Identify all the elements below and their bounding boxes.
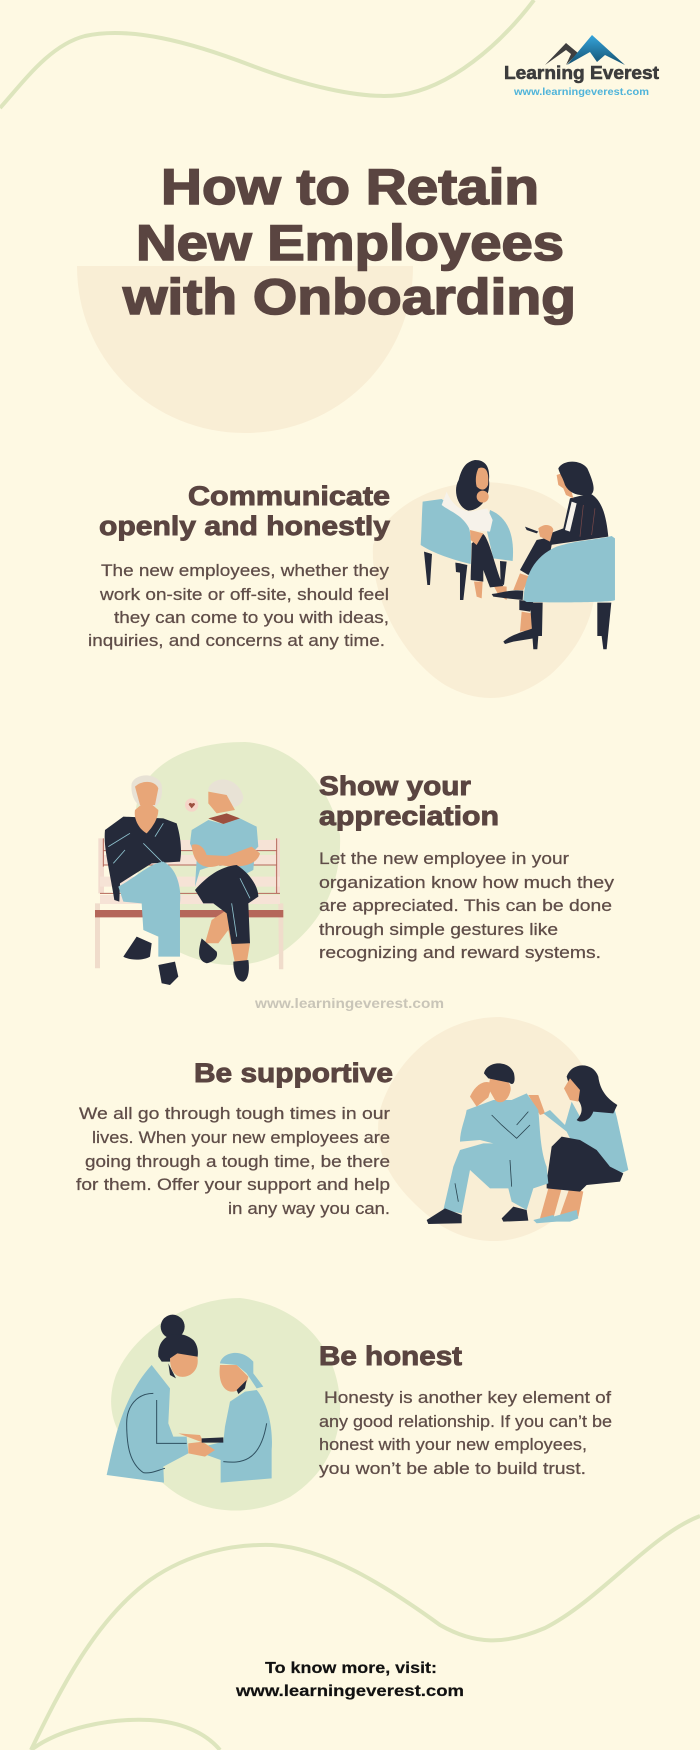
illustration: person comforting a friend bbox=[427, 1063, 628, 1224]
heading bbox=[319, 771, 499, 831]
heading: Be supportive bbox=[194, 1058, 393, 1088]
heading: Be honest bbox=[319, 1341, 462, 1371]
panel: communicate openly and honestly bbox=[88, 460, 615, 698]
body text: going through a tough time, be there bbox=[85, 1153, 390, 1171]
logo: Learning Everest bbox=[504, 35, 659, 98]
body text: through simple gestures like bbox=[319, 921, 558, 939]
body text: recognizing and reward systems. bbox=[319, 944, 601, 962]
body text: inquiries, and concerns at any time. bbox=[88, 632, 385, 650]
panel: be honest bbox=[107, 1298, 612, 1511]
heading: openly and honestly bbox=[99, 511, 390, 541]
footer call to action bbox=[235, 1660, 464, 1700]
heading bbox=[99, 481, 390, 541]
body text bbox=[76, 1105, 391, 1218]
blob background 1 bbox=[373, 482, 596, 698]
logo: Learning Everest: www.learningeverest.com bbox=[513, 87, 649, 98]
footer call to action: www.learningeverest.com bbox=[235, 1683, 464, 1700]
blob background 4 bbox=[111, 1298, 340, 1511]
body text: work on-site or off-site, should feel bbox=[99, 586, 389, 604]
body text bbox=[319, 850, 615, 962]
body text: lives. When your new employees are bbox=[92, 1129, 390, 1147]
body text: in any way you can. bbox=[228, 1200, 390, 1218]
body text: they can come to you with ideas, bbox=[114, 609, 389, 627]
body text: organization know how much they bbox=[319, 874, 615, 892]
panel: show your appreciation bbox=[95, 742, 615, 985]
body text: honest with your new employees, bbox=[319, 1436, 587, 1454]
body text: Let the new employee in your bbox=[319, 850, 570, 868]
logo: Learning Everest: Learning Everest bbox=[504, 62, 659, 83]
heading: appreciation bbox=[319, 801, 499, 831]
title: New Employees bbox=[136, 215, 564, 271]
blob background 2 bbox=[134, 742, 340, 965]
heading: Communicate bbox=[188, 481, 390, 511]
title: with Onboarding bbox=[122, 269, 576, 325]
heading: Show your bbox=[319, 771, 471, 801]
panel: be supportive bbox=[76, 1017, 628, 1241]
body text bbox=[88, 562, 390, 650]
decorative half circle behind title bbox=[77, 266, 413, 433]
illustration: two people talking in armchairs bbox=[421, 460, 615, 649]
blob background 3 bbox=[378, 1017, 600, 1241]
body text: for them. Offer your support and help bbox=[76, 1176, 390, 1194]
body text: are appreciated. This can be done bbox=[319, 897, 612, 915]
title: How to Retain bbox=[161, 159, 539, 215]
body text: you won’t be able to build trust. bbox=[319, 1460, 586, 1478]
footer call to action: To know more, visit: bbox=[265, 1660, 437, 1677]
illustration: two people holding hands bbox=[107, 1315, 272, 1483]
website watermark: www.learningeverest.com bbox=[254, 995, 444, 1011]
illustration: older couple on a bench bbox=[95, 775, 283, 985]
body text: Honesty is another key element of bbox=[324, 1389, 611, 1407]
title bbox=[122, 159, 576, 325]
body text: The new employees, whether they bbox=[101, 562, 390, 580]
body text: any good relationship. If you can’t be bbox=[319, 1413, 612, 1431]
body text bbox=[319, 1389, 612, 1478]
body text: We all go through tough times in our bbox=[79, 1105, 391, 1123]
